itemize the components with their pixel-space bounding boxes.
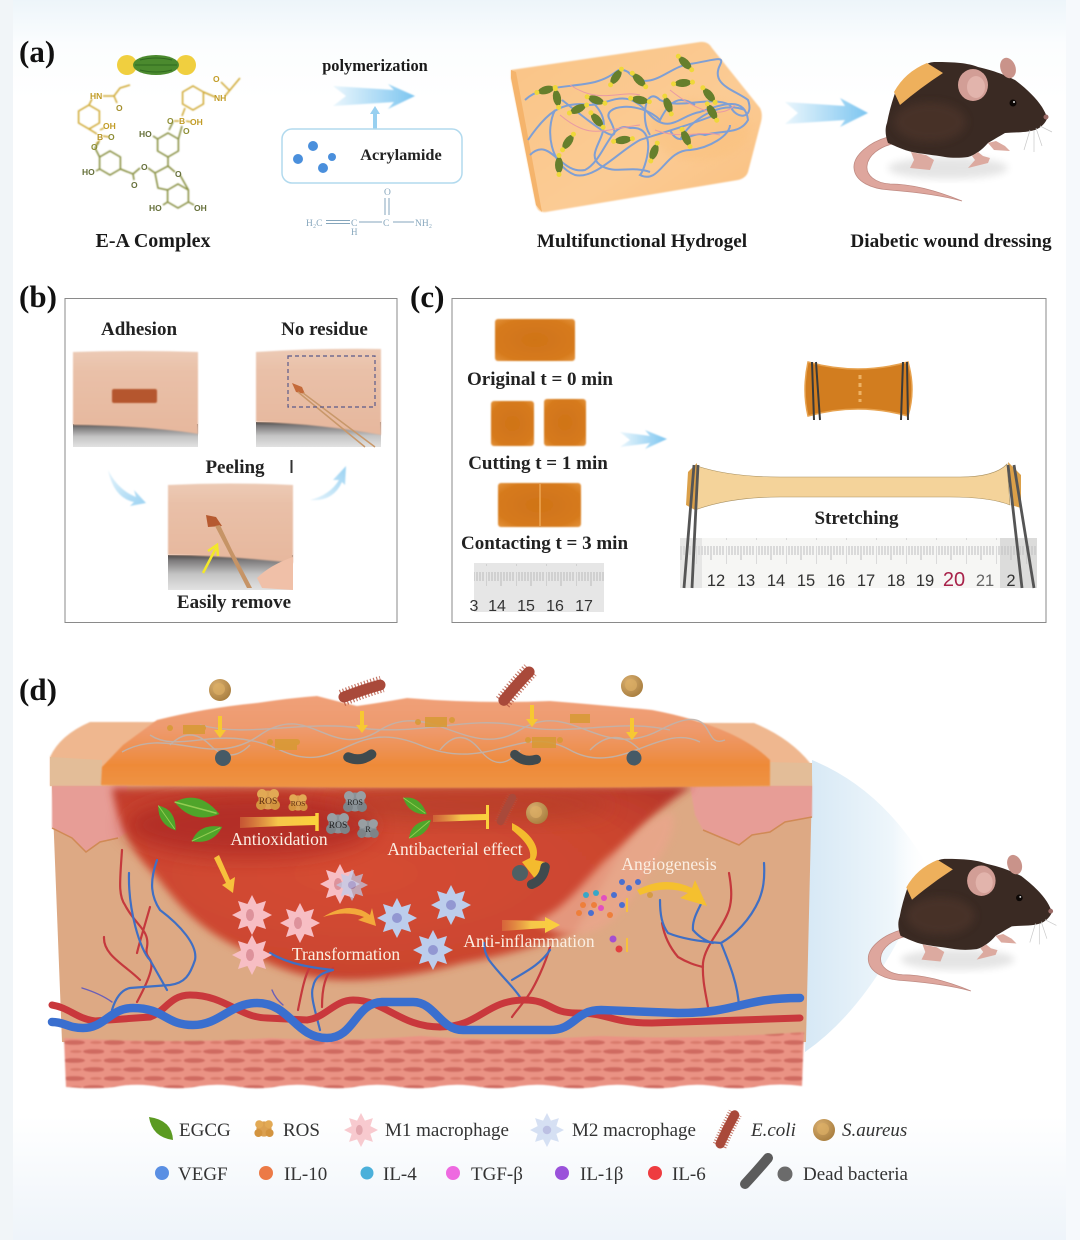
- formula: acrylamide structure: [306, 188, 432, 237]
- caption: easily remove: Easily remove: [177, 592, 291, 613]
- effect: antioxidation: ROS: [329, 821, 347, 831]
- photo: stretched gel on ruler: 12: [707, 572, 725, 590]
- photo: stretched gel on ruler: 17: [857, 572, 875, 590]
- panel c: self-healing and stretching: [410, 279, 1046, 622]
- muscle layer: [64, 1032, 804, 1088]
- photo: stretched gel on ruler: 16: [827, 572, 845, 590]
- legend: dead bacteria: [745, 1158, 909, 1185]
- legend: EGCG: EGCG: [179, 1120, 231, 1141]
- effect: antioxidation: R: [365, 825, 371, 834]
- legend: VEGF: [155, 1164, 228, 1185]
- effect: transformation: [214, 855, 471, 975]
- photo: small ruler: [470, 563, 604, 615]
- chemical labels: [82, 74, 226, 213]
- chemical labels: NH: [214, 93, 226, 103]
- effect: angiogenesis: Angiogenesis: [621, 854, 717, 874]
- formula: acrylamide structure: O: [384, 188, 391, 198]
- label d: (d): [19, 672, 57, 707]
- effect: transformation: Transformation: [292, 944, 400, 964]
- legend: S.aureus: [813, 1119, 907, 1141]
- caption: E-A complex: E-A Complex: [96, 230, 210, 252]
- mouse with dressing: [868, 853, 1056, 991]
- effect: antioxidation: [154, 789, 379, 849]
- effect: anti-inflammation: Anti-inflammation: [463, 931, 595, 951]
- chemical structure: E-A complex: [79, 78, 240, 208]
- effect: antibacterial: [387, 793, 548, 886]
- legend: TGF-β: TGF-β: [471, 1164, 523, 1185]
- effect: antioxidation: ROS: [259, 797, 277, 807]
- blood vessels: [52, 850, 800, 1038]
- box: acrylamide: Acrylamide: [360, 145, 442, 164]
- photo: stretched gel on ruler: Stretching: [814, 508, 899, 529]
- chemical labels: OH: [190, 117, 203, 127]
- hydrogel dressing: [101, 670, 770, 788]
- gel: rejoined: [498, 483, 581, 527]
- photo: no residue: [256, 349, 381, 447]
- effect: anti-inflammation: [463, 917, 627, 952]
- photo: stretched gel on ruler: 19: [916, 572, 934, 590]
- legend: IL-10: IL-10: [284, 1164, 327, 1185]
- chemical labels: O: [131, 180, 138, 190]
- legend: dead bacteria: Dead bacteria: [803, 1164, 909, 1185]
- photo: stretched gel on ruler: [680, 462, 1037, 591]
- legend: M2 macrophage: M2 macrophage: [572, 1120, 696, 1141]
- caption: original: Original t = 0 min: [467, 369, 613, 390]
- chemical labels: HO: [139, 129, 152, 139]
- icon: EGCG acrylamide dumbbell: [117, 55, 196, 75]
- legend: IL-10: [259, 1164, 327, 1185]
- legend: IL-4: [360, 1164, 417, 1185]
- effect: antioxidation: ROS: [291, 799, 305, 808]
- icon: mouse with dressing: [854, 56, 1052, 201]
- formula: acrylamide structure: C: [383, 219, 389, 229]
- effect: angiogenesis: [576, 854, 717, 918]
- photo: stretched gel on ruler: 14: [767, 572, 785, 590]
- panel a: synthesis scheme: [19, 34, 1052, 252]
- legend: S.aureus: S.aureus: [842, 1120, 907, 1141]
- legend: E.coli: [711, 1113, 796, 1146]
- legend: E.coli: E.coli: [750, 1120, 796, 1141]
- chemical labels: O: [175, 169, 182, 179]
- gel: cut pieces: [491, 399, 586, 446]
- formula: acrylamide structure: C: [351, 219, 357, 229]
- skin block: [50, 722, 812, 1047]
- caption: contacting: Contacting t = 3 min: [461, 533, 628, 554]
- photo: small ruler: 15: [517, 598, 535, 615]
- legend: IL-1β: IL-1β: [580, 1164, 623, 1185]
- chemical labels: B: [97, 132, 103, 142]
- photo: stretched gel on ruler: 18: [887, 572, 905, 590]
- label c: (c): [410, 279, 444, 314]
- legend: M1 macrophage: M1 macrophage: [385, 1120, 509, 1141]
- label b: (b): [19, 279, 57, 314]
- chemical labels: O: [167, 116, 174, 126]
- label a: (a): [19, 34, 55, 69]
- caption: multifunctional hydrogel: Multifunctional Hydrogel: [537, 231, 747, 252]
- caption: cutting: Cutting t = 1 min: [468, 453, 608, 474]
- arrow: healed to stretching: [620, 430, 667, 449]
- chemical labels: HN: [90, 91, 102, 101]
- legend: IL-6: [648, 1164, 706, 1185]
- panel b: adhesion: [19, 279, 397, 622]
- photo: small ruler: 17: [575, 598, 593, 615]
- legend: [149, 1113, 909, 1185]
- photo: unstretched gel in tweezers: [805, 362, 912, 420]
- formula: acrylamide structure: H₂C: [306, 219, 323, 229]
- legend: ROS: ROS: [283, 1120, 320, 1141]
- legend row 1: [149, 1113, 907, 1147]
- frame b: [65, 298, 397, 622]
- chemical labels: O: [213, 74, 220, 84]
- legend: M2 macrophage: [530, 1113, 696, 1147]
- photo: peeling: [168, 484, 293, 590]
- photo: small ruler: 16: [546, 598, 564, 615]
- magnification fan: [805, 760, 930, 1052]
- chemical labels: OH: [103, 121, 116, 131]
- caption: diabetic wound dressing: Diabetic wound dressing: [850, 231, 1052, 252]
- chemical labels: O: [91, 142, 98, 152]
- photo: small ruler: 14: [488, 598, 506, 615]
- heading: peeling: Peeling: [205, 457, 265, 478]
- arrow: peeling to no residue: [310, 466, 346, 500]
- photo: small ruler: 3: [470, 598, 479, 615]
- arrow: adhesion to peeling: [108, 470, 146, 506]
- box: acrylamide: [282, 129, 462, 183]
- panel d: wound healing mechanism: [19, 670, 1056, 1088]
- legend row 2: [155, 1158, 909, 1185]
- chemical labels: O: [141, 162, 148, 172]
- heading: adhesion: Adhesion: [101, 319, 177, 340]
- heading: no residue: No residue: [281, 319, 368, 340]
- chemical labels: HO: [149, 203, 162, 213]
- legend: ROS: [254, 1120, 320, 1141]
- wound bed: [112, 786, 693, 980]
- tick mark: [290, 460, 292, 473]
- arrow: polymerization: [333, 84, 415, 109]
- chemical labels: O: [108, 132, 115, 142]
- photo: stretched gel on ruler: 15: [797, 572, 815, 590]
- arrow: acrylamide up: [370, 106, 380, 129]
- frame c: [452, 298, 1046, 622]
- chemical labels: HO: [82, 167, 95, 177]
- legend: IL-1β: [555, 1164, 623, 1185]
- legend: VEGF: VEGF: [178, 1164, 228, 1185]
- arrow: to mouse: [785, 98, 868, 127]
- photo: stretched gel on ruler: 13: [737, 572, 755, 590]
- chemical labels: OH: [194, 203, 207, 213]
- photo: stretched gel on ruler: 21: [976, 572, 994, 590]
- formula: acrylamide structure: NH₂: [415, 219, 432, 229]
- chemical labels: O: [116, 103, 123, 113]
- formula: acrylamide structure: H: [351, 227, 358, 237]
- caption: polymerization: polymerization: [322, 56, 428, 75]
- hydrogel block: [511, 42, 762, 212]
- chemical labels: O: [183, 126, 190, 136]
- legend: TGF-β: [446, 1164, 523, 1185]
- photo: adhesion: [73, 351, 198, 447]
- photo: stretched gel on ruler: 2: [1006, 572, 1016, 590]
- legend: IL-4: IL-4: [383, 1164, 417, 1185]
- legend: M1 macrophage: [344, 1113, 509, 1147]
- legend: EGCG: [149, 1117, 231, 1141]
- effect: antioxidation: ROS: [347, 798, 363, 807]
- legend: IL-6: IL-6: [672, 1164, 706, 1185]
- photo: stretched gel on ruler: 20: [943, 569, 965, 591]
- effect: antibacterial: Antibacterial effect: [387, 839, 523, 859]
- effect: antioxidation: Antioxidation: [230, 829, 328, 849]
- gel: original: [495, 319, 575, 361]
- chemical labels: B: [179, 116, 185, 126]
